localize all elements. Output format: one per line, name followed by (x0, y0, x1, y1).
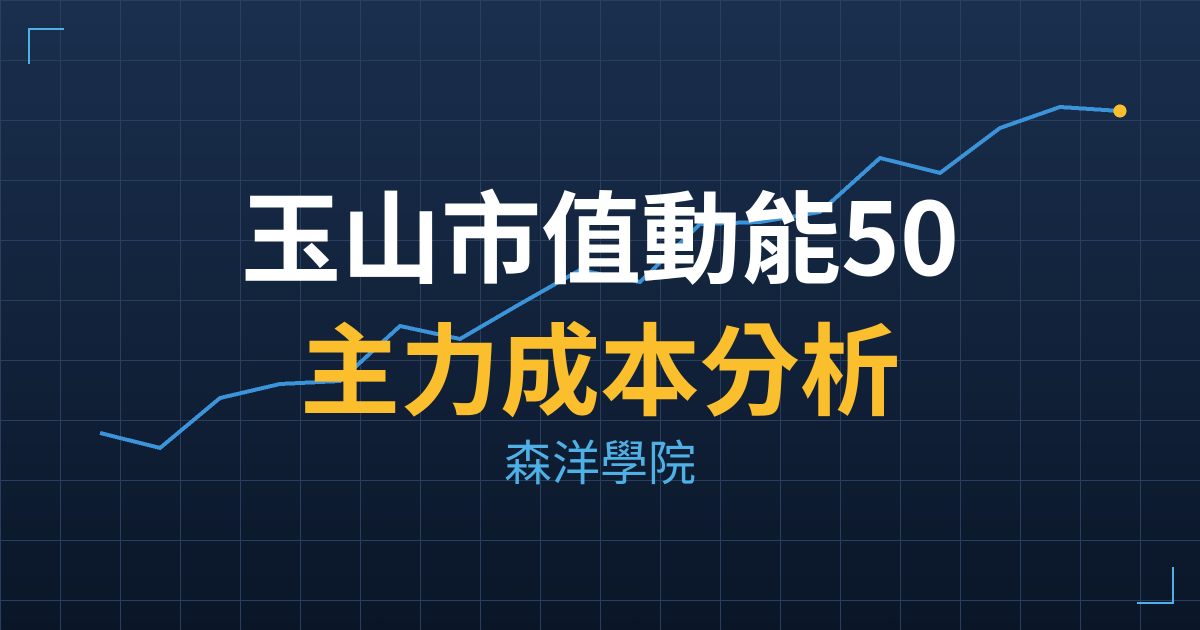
line chart (100, 107, 1120, 448)
chart end point (1114, 104, 1126, 118)
corner bracket: bottom right (1137, 567, 1173, 603)
brand name: 森洋學院 (504, 424, 696, 494)
title: 玉山市值動能50 (241, 159, 959, 304)
subtitle: 主力成本分析 (300, 291, 900, 436)
corner bracket: top left (29, 29, 64, 64)
